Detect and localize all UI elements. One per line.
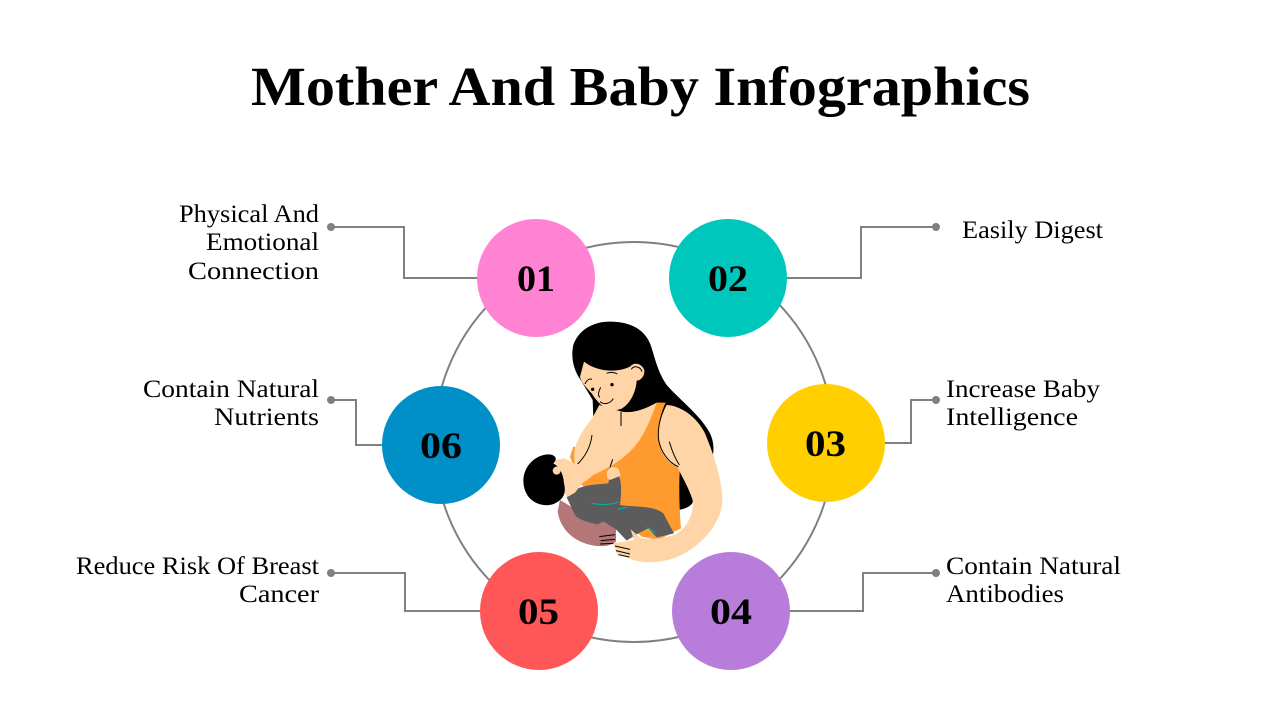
baby head hair bbox=[523, 454, 565, 505]
node 03: 03 bbox=[805, 424, 846, 465]
baby body bbox=[567, 476, 674, 541]
connector 02 bbox=[786, 223, 940, 278]
connector 06 bbox=[327, 396, 383, 445]
illustration: mother breastfeeding baby bbox=[523, 322, 722, 562]
node 06 bbox=[382, 386, 500, 504]
label 03 bbox=[946, 374, 1100, 431]
node 03 bbox=[767, 384, 885, 502]
orange top bbox=[570, 403, 681, 540]
node 01 bbox=[477, 219, 595, 337]
facial and body lines bbox=[578, 372, 621, 467]
ear line bbox=[631, 367, 642, 372]
label 04: Contain Natural bbox=[946, 551, 1121, 580]
label 04 bbox=[946, 551, 1121, 608]
label 05: Cancer bbox=[239, 579, 320, 608]
label 05 bbox=[76, 551, 320, 608]
baby clothing teal accents bbox=[592, 502, 655, 533]
title: Mother And Baby Infographics bbox=[251, 56, 1030, 117]
node 02: 02 bbox=[708, 259, 748, 300]
hair bbox=[572, 322, 713, 510]
far hand fingers bbox=[592, 521, 616, 543]
node 05: 05 bbox=[518, 592, 559, 633]
baby ear bbox=[553, 467, 561, 475]
label 06 bbox=[143, 374, 319, 431]
node 04 bbox=[672, 552, 790, 670]
far arm under baby bbox=[558, 500, 616, 546]
label 04: Antibodies bbox=[946, 579, 1064, 608]
connector 05 bbox=[327, 569, 481, 611]
baby face and skin bbox=[553, 458, 593, 497]
node 06: 06 bbox=[420, 426, 462, 467]
chest and neck skin bbox=[574, 403, 657, 479]
label 06: Contain Natural bbox=[143, 374, 319, 403]
face bbox=[580, 362, 644, 410]
label 01 bbox=[179, 199, 319, 285]
finger and arm lines bbox=[599, 405, 679, 557]
right eye bbox=[610, 383, 614, 386]
label 03: Intelligence bbox=[946, 402, 1078, 431]
node 02 bbox=[669, 219, 787, 337]
left eye bbox=[591, 388, 594, 391]
label 01: Connection bbox=[188, 256, 319, 285]
label 01: Physical And bbox=[179, 199, 319, 228]
label 06: Nutrients bbox=[214, 402, 319, 431]
label 01: Emotional bbox=[206, 227, 319, 256]
connector 01 bbox=[327, 223, 478, 278]
node 05 bbox=[480, 552, 598, 670]
connector 04 bbox=[789, 569, 940, 611]
label 05: Reduce Risk Of Breast bbox=[76, 551, 319, 580]
node 01: 01 bbox=[517, 259, 555, 300]
mother's near arm bbox=[613, 405, 722, 562]
node 04: 04 bbox=[710, 592, 752, 633]
central ring bbox=[434, 242, 834, 642]
label 03: Increase Baby bbox=[946, 374, 1100, 403]
label 02: Easily Digest bbox=[962, 215, 1103, 244]
connector 03 bbox=[884, 396, 940, 443]
baby hand bbox=[607, 467, 621, 480]
